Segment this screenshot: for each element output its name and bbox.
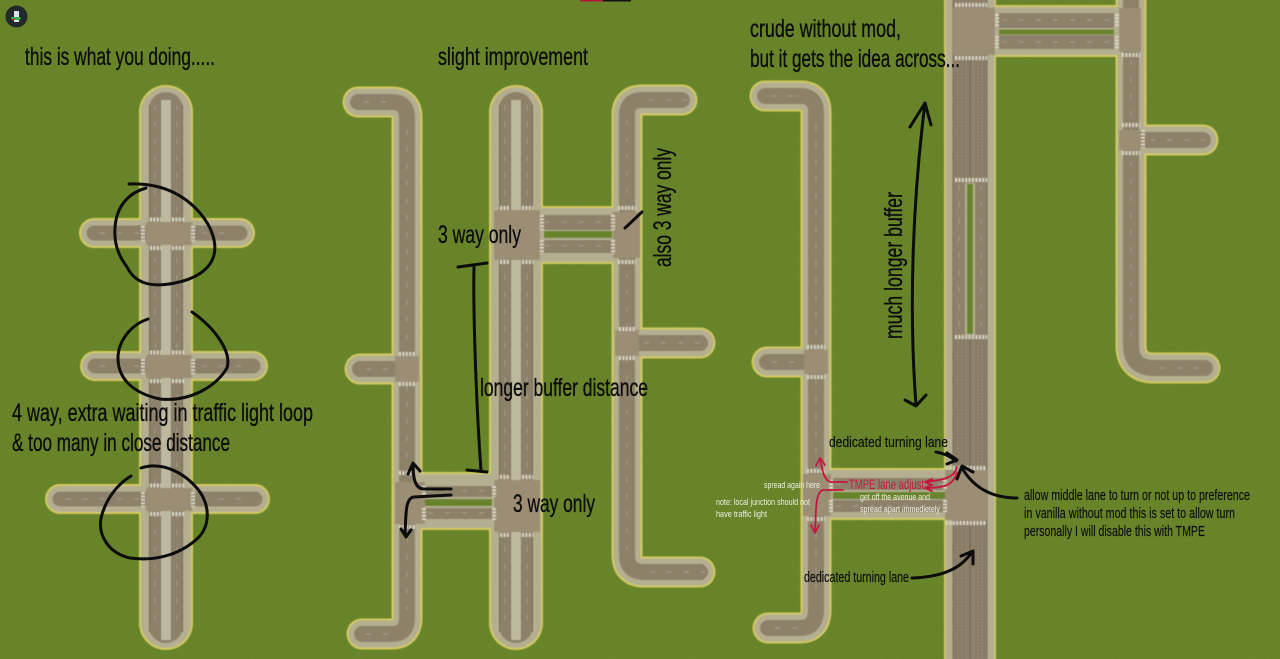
label: longer buffer distance: longer buffer distance bbox=[480, 374, 648, 402]
label: TMPE lane adjust: TMPE lane adjust bbox=[849, 476, 924, 492]
text block: local junction note: have traffic light bbox=[716, 509, 767, 520]
icon: app badge bbox=[6, 6, 28, 28]
arrow: turn down into local road bbox=[401, 495, 451, 537]
label: dedicated turning lane upper: dedicated turning lane bbox=[829, 434, 948, 451]
label: much longer buffer: much longer buffer bbox=[880, 192, 908, 339]
text block: four-way problem: & too many in close distance bbox=[12, 429, 230, 457]
top edge colour mark bbox=[580, 0, 631, 2]
arrow: middle lane pointer bbox=[957, 466, 1017, 498]
text block: four-way problem bbox=[12, 399, 313, 457]
label: also 3 way only: also 3 way only bbox=[649, 148, 677, 267]
heading: diagram 3: crude without mod, bbox=[750, 15, 901, 43]
arrow: turn up into local road bbox=[408, 463, 451, 489]
arrow: dedicated turning lane lower bbox=[912, 551, 973, 578]
label: dedicated turning lane lower: dedicated turning lane bbox=[804, 569, 909, 586]
text block: middle lane note bbox=[1024, 487, 1250, 540]
text block: middle lane note: personally I will disable this with TMPE bbox=[1024, 523, 1205, 540]
text block: get off the avenue bbox=[860, 492, 940, 515]
label: 3 way only lower: 3 way only bbox=[513, 490, 595, 518]
annotation: circled junctions in diagram 1 bbox=[100, 184, 228, 559]
panel: diagram 1 four-way road layout bbox=[60, 100, 255, 640]
annotation: pointer tick to upper junction bbox=[625, 212, 642, 228]
text block: local junction note: note: local junction should not bbox=[716, 497, 810, 508]
label: 3 way only upper: 3 way only bbox=[438, 221, 521, 249]
text block: local junction note bbox=[716, 497, 810, 520]
heading: diagram 1: this is what you doing..... bbox=[25, 43, 215, 71]
heading: diagram 3 bbox=[750, 15, 960, 73]
arrow: much longer buffer span bbox=[905, 103, 931, 406]
arrow: dedicated turning lane upper bbox=[936, 452, 957, 464]
heading: diagram 3: but it gets the idea across... bbox=[750, 45, 960, 73]
annotation: buffer bracket in diagram 2 bbox=[458, 263, 487, 472]
heading: diagram 2: slight improvement bbox=[438, 43, 588, 71]
arrows: red TMPE lane adjustments bbox=[811, 458, 957, 533]
text block: get off the avenue: get off the avenue and bbox=[860, 492, 930, 503]
label: spread again here: spread again here bbox=[764, 480, 820, 491]
panel: diagram 3 long-buffer road layout bbox=[765, 0, 1210, 659]
panel: diagram 2 three-way road layout bbox=[358, 100, 705, 640]
text block: get off the avenue: spread apart immedietely bbox=[860, 504, 940, 515]
text block: four-way problem: 4 way, extra waiting in traffic light loop bbox=[12, 399, 313, 427]
